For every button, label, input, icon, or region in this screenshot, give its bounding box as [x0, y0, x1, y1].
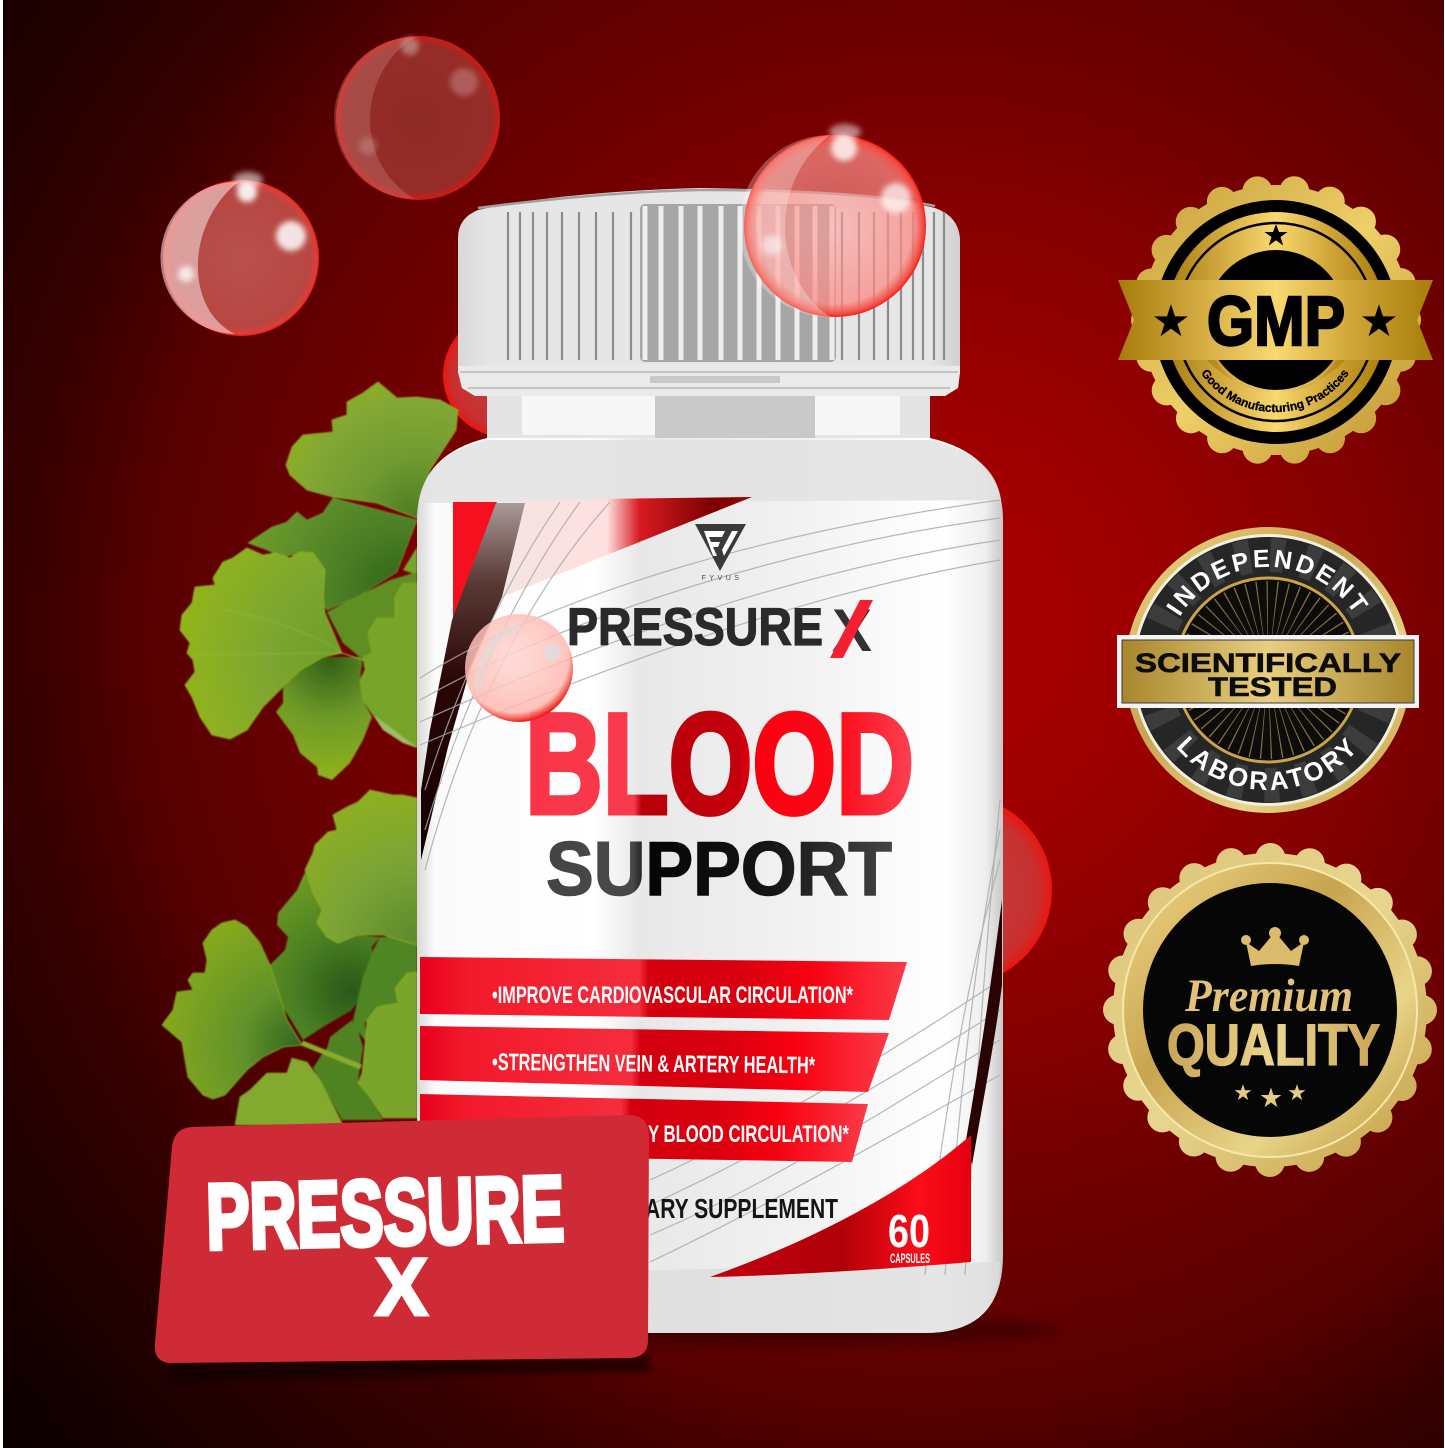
bubble: behind neck — [443, 313, 567, 437]
benefit bar 1 — [420, 957, 907, 1020]
heading: BLOOD: BLOOD — [525, 685, 914, 844]
badge: GMP — [1118, 176, 1433, 464]
crown icon — [1241, 927, 1309, 966]
brand logo — [695, 524, 746, 582]
card text: PRESSURE: PRESSURE — [205, 1156, 565, 1269]
leaf: slim — [353, 937, 417, 1043]
leaf: big — [180, 548, 363, 739]
capsule count: 60 — [888, 1205, 930, 1257]
bottle — [417, 390, 1003, 1333]
leaf: bottom — [235, 1058, 343, 1125]
label art: top red — [502, 497, 752, 597]
ginkgo leaves: upper cluster — [180, 382, 458, 780]
cap centre ribbed band — [640, 204, 836, 362]
bottle neck — [487, 390, 930, 450]
bubble: on label — [465, 614, 573, 722]
leaf: big — [162, 920, 302, 1099]
leaf: small between — [313, 1020, 383, 1120]
bubble: on cap — [739, 124, 926, 317]
red card — [155, 1115, 649, 1363]
tested heading line 2: TESTED — [1208, 672, 1337, 702]
GMP text: GMP — [1207, 282, 1345, 360]
product name: PRESSURE X: PRESSURE — [567, 598, 823, 657]
brand logo: FYVUS — [702, 575, 742, 582]
leaf: right — [360, 583, 417, 747]
GMP arc text: Good Manufacturing Practices — [1202, 370, 1348, 412]
benefit bar 3 — [420, 1094, 868, 1162]
leaf: lower — [276, 657, 372, 780]
cap thin grooves — [508, 212, 944, 360]
tested heading line 1: SCIENTIFICALLY — [1135, 648, 1401, 678]
leaf: small back — [403, 547, 417, 575]
three stars — [1233, 1081, 1307, 1114]
bottle shadow — [540, 1316, 1060, 1344]
bottle body — [417, 438, 1003, 1333]
label art: right dark stripe — [966, 900, 1002, 1165]
leaf: small bottom — [373, 715, 417, 748]
bottle shoulder shading — [419, 440, 1001, 503]
leaf: second — [248, 498, 417, 610]
card text: X: X — [375, 1242, 428, 1333]
bubble: top — [334, 36, 500, 200]
dietary supplement text: ARY SUPPLEMENT — [645, 1193, 838, 1224]
GMP ribbon star right: ★ — [1359, 296, 1399, 347]
cap lower lip — [458, 364, 960, 396]
three stars: ★ — [1287, 1081, 1307, 1106]
capsule count: CAPSULES — [890, 1250, 930, 1266]
label art: red corner — [453, 502, 497, 622]
label art: thin lines — [420, 500, 1000, 1275]
badge: scientifically tested — [1117, 527, 1419, 813]
GMP ribbon star left: ★ — [1151, 296, 1191, 347]
Premium script: Premium — [1184, 970, 1353, 1022]
three stars: ★ — [1259, 1083, 1283, 1114]
label art: bottom wedge — [710, 1135, 971, 1277]
INDEPENDENT arc text: INDEPENDENT — [1166, 550, 1369, 616]
ginkgo leaves: lower cluster — [162, 790, 417, 1125]
product name: PRESSURE X: X — [832, 597, 872, 664]
badge: premium quality — [1113, 853, 1427, 1167]
tested banner — [1117, 635, 1419, 708]
bubble: behind bottle right — [862, 795, 1052, 985]
leaf: mid dark — [327, 572, 417, 660]
label art: dark swoosh — [421, 503, 525, 860]
leaf: stem — [302, 1043, 361, 1067]
three stars: ★ — [1233, 1081, 1253, 1106]
benefit text 3: Y BLOOD CIRCULATION* — [648, 1121, 849, 1148]
benefit text 2: •STRENGTHEN VEIN & ARTERY HEALTH* — [492, 1049, 816, 1079]
leaf: top — [286, 382, 458, 518]
card shadow — [170, 1355, 650, 1380]
right edge strip — [1444, 0, 1445, 1448]
leaf: fan top — [305, 790, 417, 945]
benefit bar 2 — [420, 1026, 889, 1092]
bubble: left — [160, 172, 319, 336]
leaf: right — [358, 972, 417, 1118]
bottle cap — [458, 188, 960, 396]
LABORATORY arc text: LABORATORY — [1176, 736, 1354, 790]
heading: SUPPORT: SUPPORT — [546, 827, 892, 912]
cap white ridges — [645, 206, 832, 360]
benefit text 1: •IMPROVE CARDIOVASCULAR CIRCULATION* — [492, 982, 853, 1009]
leaf: mid — [270, 872, 380, 1040]
GMP ribbon — [1118, 280, 1433, 360]
QUALITY: QUALITY — [1167, 1013, 1380, 1078]
bottle base shading — [420, 1262, 1000, 1333]
